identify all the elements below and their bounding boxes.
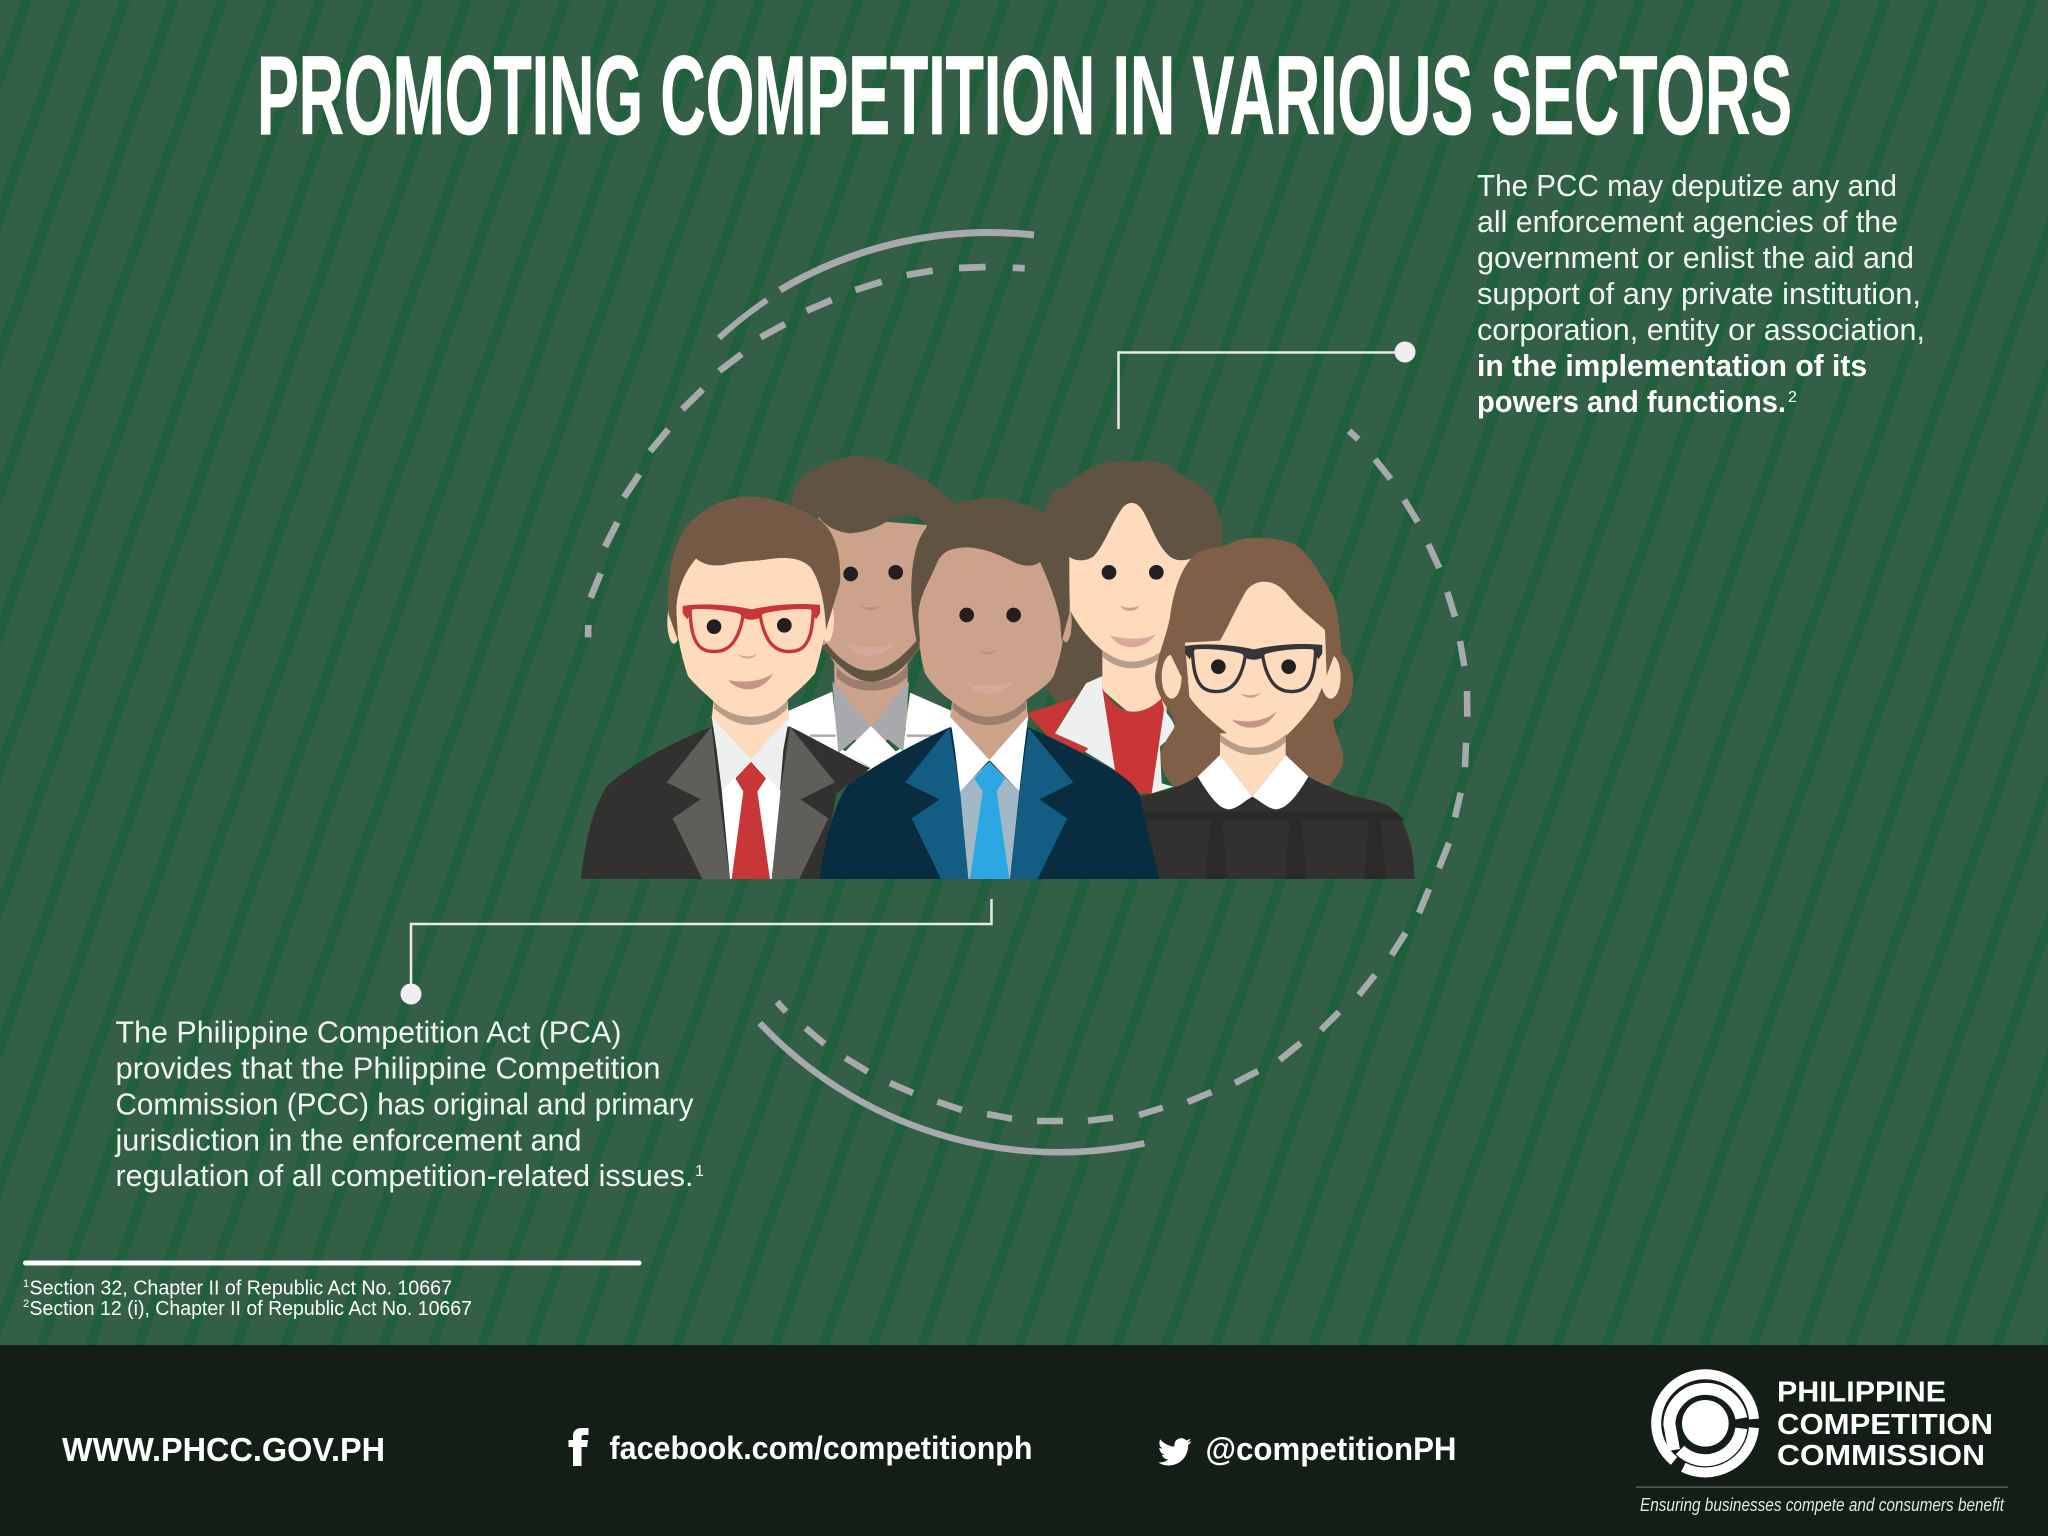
text block: PCC deputize: powers and functions. bbox=[1477, 384, 1786, 419]
text block: Philippine Competition Act: The Philippine Competition Act (PCA) bbox=[116, 1014, 622, 1050]
illustration: group of five people bbox=[581, 456, 1414, 879]
connector: bottom left callout bbox=[400, 899, 992, 1004]
text block: Philippine Competition Act: provides that the Philippine Competition bbox=[116, 1050, 660, 1086]
person: back woman bbox=[1027, 461, 1223, 793]
text block: PCC deputize: all enforcement agencies of the bbox=[1477, 204, 1898, 239]
text block: Philippine Competition Act bbox=[115, 1014, 704, 1193]
footnotes: Section 12 (i), Chapter II of Republic Act No. 10667 bbox=[30, 1298, 472, 1320]
footer band bbox=[0, 1345, 2048, 1536]
text block: PCC deputize: corporation, entity or association, bbox=[1477, 312, 1925, 347]
logo: Philippine Competition Commission bbox=[1636, 1374, 2008, 1515]
icon: twitter bird bbox=[1158, 1438, 1192, 1465]
person: front woman with black glasses bbox=[1137, 538, 1414, 879]
logo wordmark: PHILIPPINE bbox=[1777, 1376, 1946, 1408]
footnotes: 2 bbox=[23, 1298, 29, 1310]
connector: top right callout bbox=[1118, 342, 1416, 429]
footnotes bbox=[23, 1278, 472, 1320]
text block: PCC deputize: in the implementation of its bbox=[1477, 348, 1867, 383]
text block: Philippine Competition Act: 1 bbox=[695, 1163, 704, 1180]
logo mark bbox=[1656, 1374, 1754, 1472]
footer: twitter handle: @competitionPH bbox=[1206, 1431, 1456, 1467]
text block: Philippine Competition Act: jurisdiction in the enforcement and bbox=[115, 1122, 582, 1158]
person: left man with red glasses bbox=[581, 497, 870, 879]
person: back man with beard bbox=[787, 456, 955, 772]
solid arc: bottom bbox=[760, 1023, 1144, 1152]
footer: facebook address: facebook.com/competitionph bbox=[610, 1430, 1032, 1466]
solid arc: top bbox=[719, 233, 1034, 338]
footnotes: Section 32, Chapter II of Republic Act No. 10667 bbox=[30, 1278, 452, 1300]
icon: facebook bbox=[568, 1428, 588, 1466]
logo wordmark: COMMISSION bbox=[1777, 1440, 1985, 1472]
footnotes: 1 bbox=[23, 1278, 29, 1290]
text block: PCC deputize: support of any private institution, bbox=[1477, 276, 1921, 311]
text block: Philippine Competition Act: Commission (PCC) has original and primary bbox=[116, 1086, 694, 1122]
text block: Philippine Competition Act: regulation of all competition-related issues. bbox=[116, 1158, 694, 1193]
person: center man with blue tie bbox=[819, 498, 1159, 879]
text block: PCC deputize: government or enlist the aid and bbox=[1477, 240, 1914, 275]
logo wordmark: COMPETITION bbox=[1777, 1409, 1993, 1441]
text block: PCC deputize: The PCC may deputize any and bbox=[1477, 168, 1897, 203]
dashed arc: upper left bbox=[588, 267, 1025, 637]
footnote rule bbox=[23, 1260, 642, 1266]
text block: PCC deputize bbox=[1477, 168, 1925, 419]
text block: PCC deputize: 2 bbox=[1788, 389, 1797, 406]
logo wordmark bbox=[1777, 1376, 1993, 1472]
footer: website: WWW.PHCC.GOV.PH bbox=[62, 1431, 385, 1468]
dashed arc: lower right bbox=[777, 431, 1467, 1121]
